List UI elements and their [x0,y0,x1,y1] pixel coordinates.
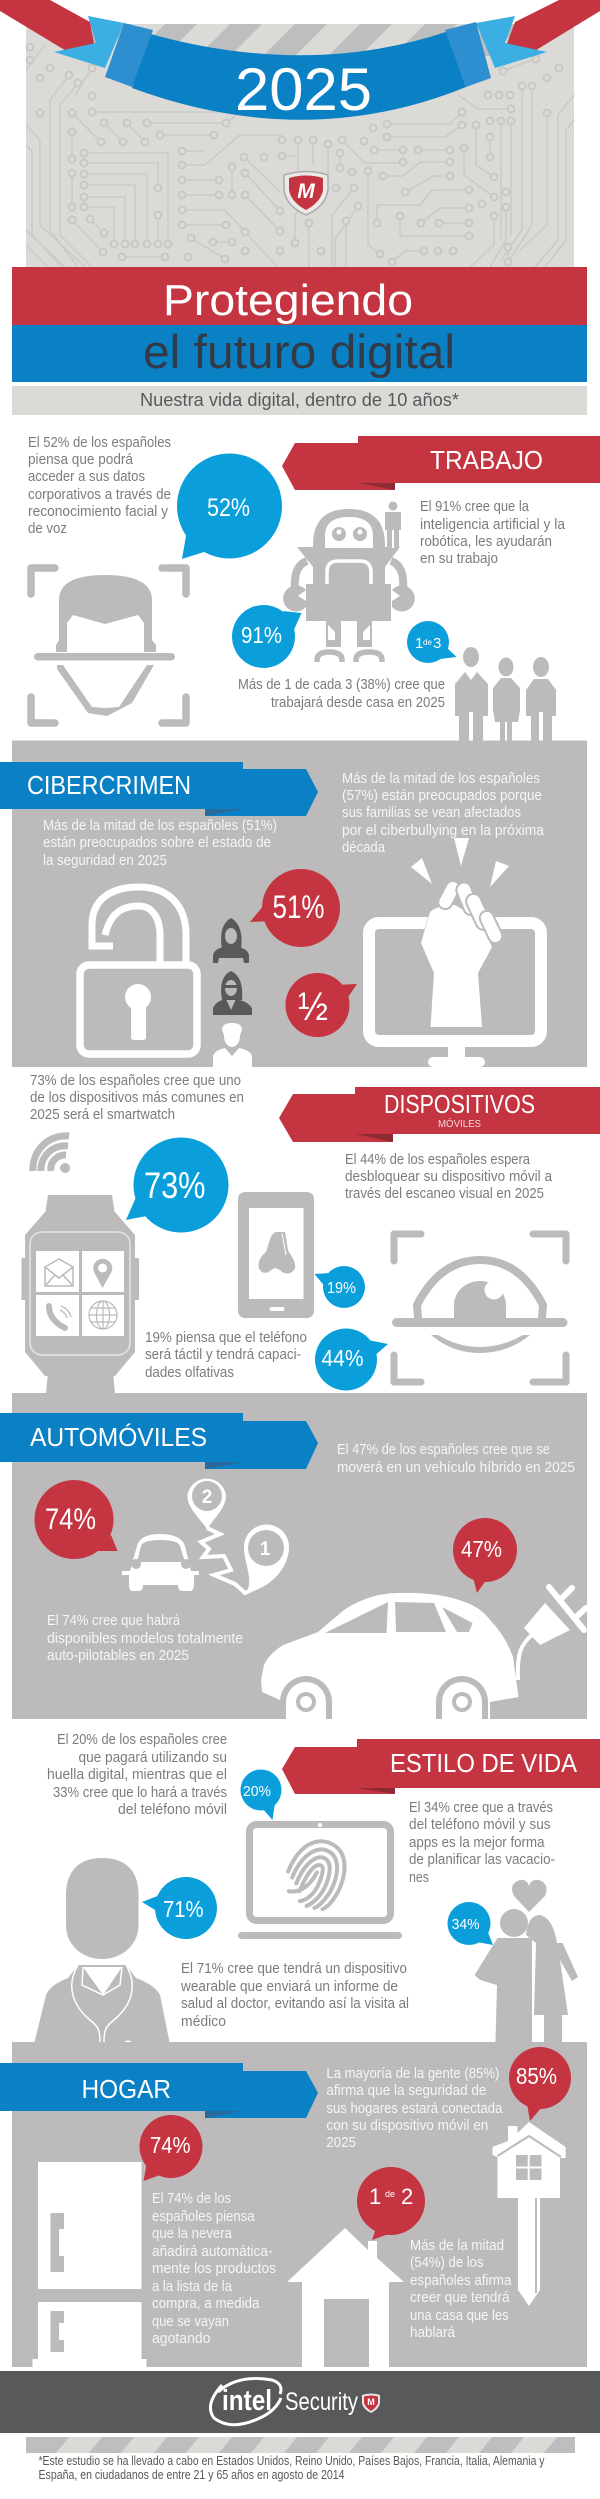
text: 57 percent: sus familias se vean afectados [342,805,521,821]
icon: self driving car [122,1534,199,1591]
bubble: 34% [448,1902,493,1945]
text: 54 percent: Más de la mitad [410,2238,504,2254]
panel: cibercrimen [0,740,587,1067]
ribbon with year [0,0,600,123]
bubble: 1 de 3: 1 [415,635,423,652]
icon: man [213,1023,252,1067]
text: 52 percent: reconocimiento facial y [28,504,169,520]
bubble: 52%: 52% [207,494,250,522]
bubble: 1 de 2: 1 [369,2184,381,2209]
text: 34 percent: del teléfono móvil y sus [409,1817,551,1833]
bubble: 44%: 44% [322,1345,364,1371]
banner: cibercrimen: CIBERCRIMEN [27,770,191,800]
text: 51 percent [43,818,277,869]
text: 54 percent: hablará [410,2325,456,2341]
text: 74 percent fridge: añadirá automática- [152,2244,273,2260]
bubble: 34%: 34% [452,1916,480,1933]
icon: small person on robot [385,502,401,548]
text: uno de cada tres [238,677,445,711]
bubble: 71% [142,1877,217,1939]
text: 85 percent: La mayoría de la gente (85%) [326,2066,499,2082]
text: 51 percent: la seguridad en 2025 [43,853,167,869]
text: 54 percent: creer que tendrá [410,2290,510,2306]
text: 20 percent: El 20% de los españoles cree [57,1732,227,1748]
text: 74 percent fridge [152,2191,276,2347]
text: 54 percent [410,2238,512,2341]
text: 51 percent: Más de la mitad de los españoles (51%) [43,818,277,834]
bubble: 47%: 47% [461,1536,502,1562]
icon: route pin 1 [244,1524,289,1595]
text: 73 percent: 73% de los españoles cree que uno [30,1073,241,1089]
title line two: el futuro digital [143,325,455,378]
text: 20 percent [47,1732,227,1818]
title banner [12,267,587,415]
banner: dispositivos [279,1087,600,1142]
panel: estilo de vida [34,1732,600,2042]
text: 44 percent: El 44% de los españoles espera [345,1152,531,1168]
text: 20 percent: del teléfono móvil [118,1802,227,1818]
decorative stripe strip [26,2437,575,2453]
text: 52 percent [28,435,171,537]
text: 74 percent fridge: españoles piensa [152,2209,255,2225]
text: 54 percent: españoles afirma [410,2273,512,2289]
text: 44 percent: desbloquear su dispositivo móvil a [345,1169,553,1185]
text: uno de cada tres: Más de 1 de cada 3 (38%) cree que [238,677,445,693]
text: 85 percent: 2025 [326,2135,356,2151]
bubble: 85% [509,2047,571,2121]
logo: small shield [362,2394,380,2413]
icon: fridge [32,2162,146,2367]
text: 57 percent [342,771,545,856]
text: uno de cada tres: trabajará desde casa en 2025 [271,695,445,711]
icon: route pin 2: 2 [202,1487,212,1508]
text: 74 percent autopilot: disponibles modelos totalmente [47,1631,243,1647]
subtitle: Nuestra vida digital, dentro de 10 años* [140,389,459,410]
text: 57 percent: por el ciberbullying en la próxima [342,823,545,839]
panel: dispositivos moviles [22,1073,600,1393]
text: 85 percent [326,2066,503,2151]
icon: doctor [34,1858,170,2042]
banner: dispositivos: DISPOSITIVOS [384,1089,535,1119]
text: 85 percent: con su dispositivo móvil en [326,2118,488,2134]
bubble: 20% [240,1770,282,1820]
bubble: 51%: 51% [272,889,324,925]
icon: woman with glasses [213,971,252,1015]
bubble: one half: ½ [298,985,328,1029]
icon: house key [492,2122,566,2306]
text: 71 percent: salud al doctor, evitando así la visita al [181,1996,409,2012]
bubble: 1 de 3 [407,621,456,663]
text: 19 percent: 19% piensa que el teléfono [145,1330,307,1346]
icon: impact rays [411,838,509,887]
bubble: 74% autopilot: 74% [45,1503,96,1536]
text: 54 percent: (54%) de los [410,2255,484,2271]
text: 19 percent [145,1330,307,1381]
bubble: 51% [250,869,340,947]
text: 20 percent: que pagará utilizando su [78,1750,227,1766]
icon: smartwatch [22,1195,139,1393]
bubble: 71%: 71% [163,1896,204,1922]
text: 34 percent: El 34% cree que a través [409,1800,553,1816]
icon: couple with heart [475,1880,578,2042]
text: 91 percent [420,499,566,567]
logo: intel: intel [222,2385,272,2417]
text: 34 percent: apps es la mejor forma [409,1835,545,1851]
bubble: 74% autopilot [34,1480,118,1559]
icon: McAfee shield [284,172,328,215]
text: 34 percent: de planificar las vacacio- [409,1852,555,1868]
text: 74 percent autopilot: El 74% cree que habrá [47,1613,181,1629]
text: 73 percent [30,1073,244,1123]
text: 71 percent: El 71% cree que tendrá un dispositivo [181,1961,407,1977]
banner: dispositivos: MÓVILES [438,1117,481,1130]
icon: open padlock [80,887,197,1054]
icon: route line [201,1528,262,1593]
icon: eye scan [392,1234,568,1382]
text: 52 percent: acceder a sus datos [28,469,145,485]
bubble: 73% [126,1138,228,1232]
icon: wifi [33,1136,70,1173]
text: 44 percent [345,1152,553,1202]
text: 57 percent: Más de la mitad de los españoles [342,771,540,787]
text: 74 percent fridge: a la lista de la [152,2279,233,2295]
footnote [38,2454,545,2482]
icon: talking house [287,2228,404,2367]
bubble: 1 de 2: de [385,2189,395,2199]
text: 20 percent: huella digital, mientras que el [47,1767,227,1783]
text: 71 percent: médico [181,2014,226,2030]
text: 19 percent: será táctil y tendrá capaci- [145,1347,301,1363]
text: 52 percent: piensa que podrá [28,452,134,468]
bubble: 44% [315,1328,388,1390]
banner: trabajo [282,436,600,490]
text: 74 percent fridge: que se vayan [152,2314,229,2330]
banner: automoviles: AUTOMÓVILES [30,1422,207,1452]
icon: route pin 2 [187,1479,226,1529]
text: 74 percent autopilot [47,1613,243,1664]
icon: facial recognition [31,568,186,723]
icon: laptop fingerprint [238,1823,402,1939]
bubble: 1 de 2: 2 [401,2184,413,2209]
text: 74 percent fridge: compra, a medida [152,2296,260,2312]
text: 74 percent autopilot: auto-pilotables en 2025 [47,1648,189,1664]
text: 91 percent: en su trabajo [420,551,498,567]
logo: small shield: M [367,2397,375,2407]
text: 85 percent: sus hogares estará conectada [326,2101,503,2117]
bubble: 85%: 85% [516,2063,557,2089]
text: 71 percent: wearable que enviará un informe de [180,1979,398,1995]
text: 54 percent: una casa que les [410,2308,509,2324]
text: 74 percent fridge: que la nevera [152,2226,233,2242]
bubble: 1 de 2 [357,2167,425,2240]
bubble: 1 de 3: 3 [433,635,441,652]
banner: hogar: HOGAR [82,2074,171,2104]
watch tile: mail [36,1251,79,1292]
bubble: 47% [453,1518,517,1593]
text: 19 percent: dades olfativas [145,1365,234,1381]
icon: McAfee shield: M [297,180,315,203]
text: 57 percent: década [342,840,386,856]
bubble: 19% [314,1266,365,1308]
watch tile: globe [82,1295,124,1336]
panel: automoviles [0,1393,587,1719]
title line one: Protegiendo [163,276,413,325]
text: 91 percent: inteligencia artificial y la [420,517,566,533]
text: 51 percent: están preocupados sobre el estado de [43,835,271,851]
bubble: 74% fridge: 74% [150,2132,191,2158]
text: 52 percent: El 52% de los españoles [28,435,171,451]
footer: intel security [0,2371,600,2433]
text: 74 percent fridge: El 74% de los [152,2191,231,2207]
icon: plug [518,1587,586,1680]
icon: route pin 1: 1 [260,1539,271,1560]
bubble: 20%: 20% [243,1783,271,1800]
text: 47 percent: moverá en un vehículo híbrido en 2025 [337,1460,575,1476]
text: 52 percent: corporativos a través de [28,487,171,503]
text: 44 percent: través del escaneo visual en 2025 [345,1186,544,1202]
text: 71 percent [180,1961,409,2030]
text: 57 percent: (57%) están preocupados porque [342,788,542,804]
icon: robot [283,502,415,662]
banner: trabajo: TRABAJO [430,445,543,475]
text: 74 percent fridge: mente los productos [152,2261,276,2277]
bubble: 91%: 91% [241,622,282,648]
icon: three people [455,647,556,741]
icon: monitor with fist [369,838,541,1067]
logo text: security: Security [285,2388,358,2416]
bubble: 1 de 3: de [423,638,432,647]
banner: estilo de vida [282,1739,600,1794]
banner: cibercrimen [0,762,318,816]
text: 34 percent [409,1800,555,1886]
bubble: 52% [177,454,282,559]
panel: hogar [0,2042,587,2367]
banner: hogar [0,2063,318,2118]
logo: intel [210,2378,281,2425]
bubble: 19%: 19% [327,1280,356,1297]
icon: electric car [261,1587,586,1719]
panel: header with circuit background [0,0,600,270]
text: 73 percent: 2025 será el smartwatch [30,1107,175,1123]
ribbon with year: 2025 [235,56,372,123]
icon: woman [213,918,249,963]
footnote: España, en ciudadanos de entre 21 y 65 años en agosto de 2014 [38,2468,345,2482]
text: 91 percent: robótica, les ayudarán [420,534,552,550]
text: 52 percent: de voz [28,521,67,537]
text: 34 percent: nes [409,1870,429,1886]
watch tile: phone [36,1295,79,1336]
text: 47 percent [337,1442,575,1476]
banner: estilo de vida: ESTILO DE VIDA [390,1748,578,1778]
text: 20 percent: 33% cree que lo hará a través [53,1785,227,1801]
text: 73 percent: de los dispositivos más comunes en [30,1090,244,1106]
bubble: 74% fridge [140,2115,202,2181]
watch tile: location [82,1251,124,1292]
banner: automoviles [0,1413,318,1469]
text: 85 percent: afirma que la seguridad de [326,2083,486,2099]
bubble: 91% [232,605,302,668]
text: 47 percent: El 47% de los españoles cree que se [337,1442,550,1458]
text: 91 percent: El 91% cree que la [420,499,530,515]
text: 74 percent fridge: agotando [152,2331,210,2347]
panel: trabajo [28,435,600,741]
bubble: one half [286,973,357,1037]
bubble: 73%: 73% [144,1165,206,1206]
icon: phone with nose [238,1192,314,1318]
